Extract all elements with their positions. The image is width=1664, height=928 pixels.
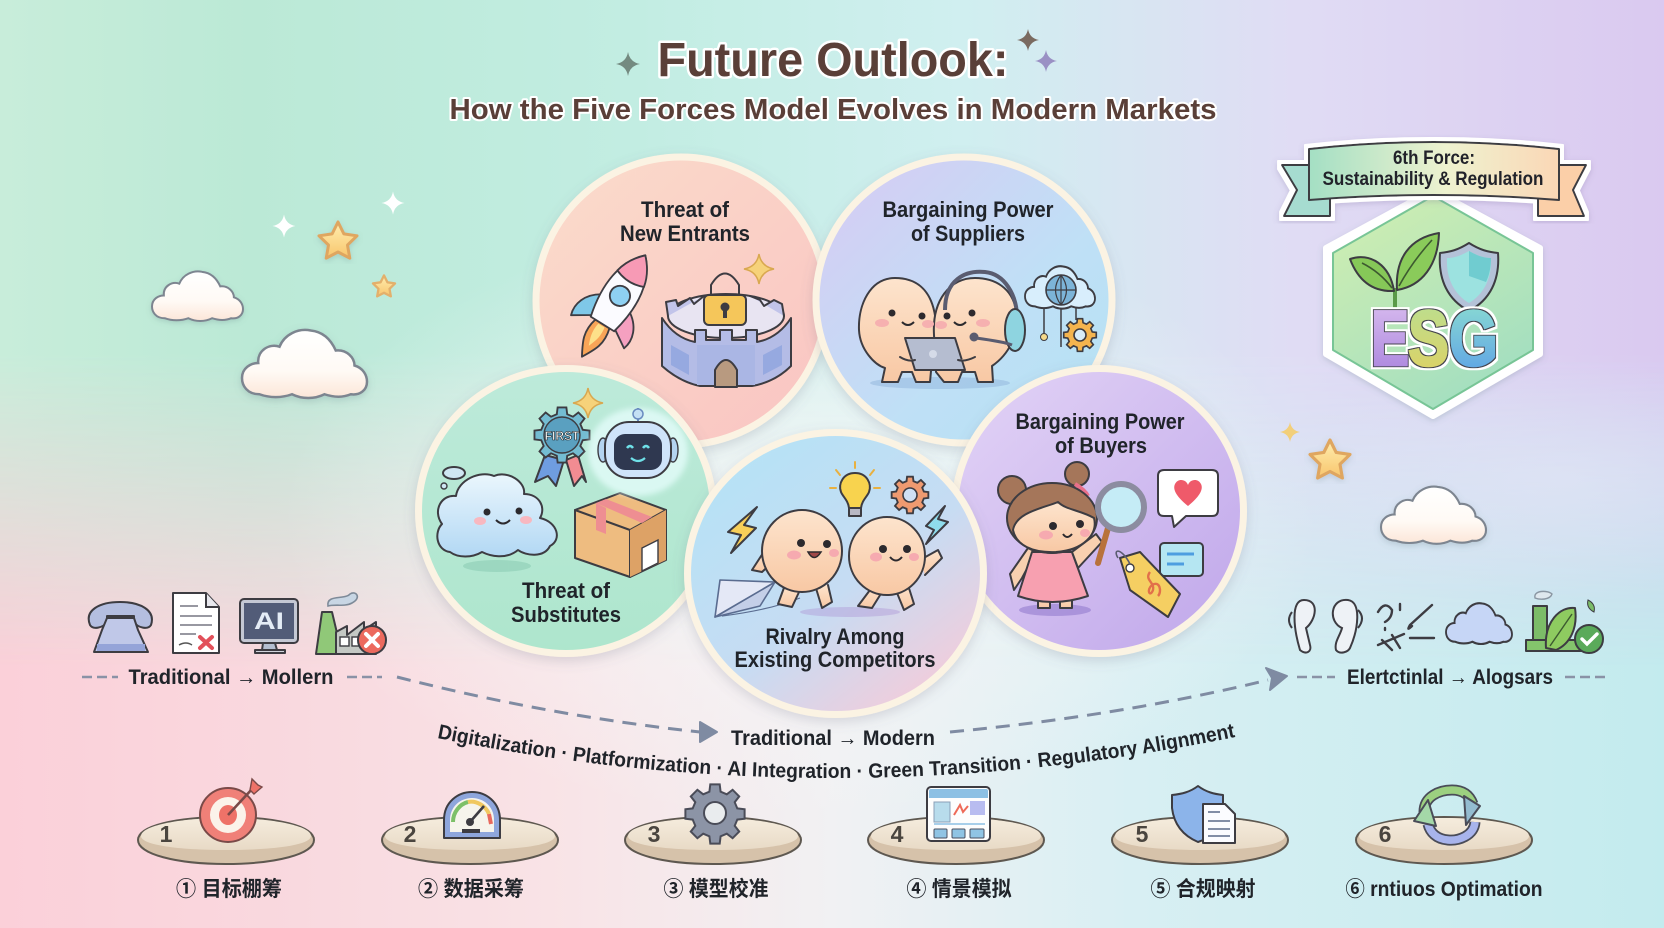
icon: smiling cloud [437, 467, 557, 572]
icon: light bulb [830, 462, 880, 516]
heading: buyers: of Buyers [1055, 433, 1147, 458]
icon: paper plane [715, 580, 800, 617]
icon: browser window [927, 787, 990, 841]
icon: rocket [554, 238, 673, 374]
arrow: left dashed to centre [397, 677, 717, 742]
icon: shield and document [1172, 786, 1235, 843]
step 6: cycle: 6 [1379, 821, 1391, 847]
panel: bargaining power of suppliers [816, 157, 1112, 443]
step label: ② 数据采筹 [418, 878, 524, 901]
icon: AI monitor [240, 599, 298, 653]
heading: buyers: Bargaining Power [1016, 409, 1185, 434]
arrow: centre dashed to right [950, 668, 1287, 732]
step 1: target [138, 779, 314, 901]
right caption: Elertctinlal → Alogsars [1347, 666, 1553, 689]
banner text [1322, 148, 1544, 190]
heading: rivalry: Existing Competitors [734, 647, 936, 672]
banner text: Sustainability & Regulation [1322, 169, 1544, 190]
step 4: browser window [868, 787, 1044, 901]
icon: target [200, 779, 262, 842]
icon: document [173, 593, 219, 653]
icon: two characters with headset and laptop [859, 272, 1025, 389]
icon: two competitors [752, 510, 942, 617]
icon: message card [1160, 543, 1203, 576]
icon: green factory [1526, 591, 1603, 653]
icon: factory with X [316, 593, 386, 654]
heading: substitutes [511, 578, 621, 627]
step label: ⑤ 合规映射 [1150, 878, 1256, 901]
step 1: target: 1 [160, 821, 173, 847]
panel: bargaining power of buyers [954, 368, 1244, 654]
curved trends text: Digitalization · Platformization · AI Integration · Green Transition · Regulatory Alignment [438, 724, 1236, 782]
ribbon banner [1282, 142, 1586, 216]
icon: cloud [1446, 603, 1512, 644]
icon: left lightning [728, 507, 757, 553]
decorative clouds and stars left [152, 192, 404, 398]
sixth force ESG badge [1282, 142, 1586, 416]
icon: award badge [534, 388, 603, 486]
decorative clouds and stars right [1280, 422, 1486, 544]
step 2: gauge: 2 [404, 821, 416, 847]
title sparkles [616, 29, 1057, 76]
heading: suppliers: of Suppliers [911, 221, 1025, 246]
icon: award badge: FIRST [545, 429, 580, 443]
traditional icons row [89, 593, 386, 654]
main title: Future Outlook: [658, 34, 1008, 87]
heading: new entrants: Threat of [641, 197, 730, 222]
icon: optimisation cycle [1414, 790, 1480, 840]
icon: gauge [444, 792, 500, 838]
hexagon badge [1326, 190, 1540, 416]
step label: ④ 情景模拟 [906, 878, 1012, 901]
heading: suppliers: Bargaining Power [882, 197, 1054, 222]
ESG wordmark: G [1449, 294, 1498, 382]
banner text: 6th Force: [1393, 148, 1475, 169]
step 5: shield and document: 5 [1136, 821, 1149, 847]
icon: cloud network and gear [1025, 266, 1096, 351]
subtitle: How the Five Forces Model Evolves in Modern Markets [450, 94, 1216, 126]
icon: earpieces [1289, 600, 1362, 653]
modern icons row [1289, 591, 1603, 653]
centre caption: Traditional → Modern [731, 727, 935, 750]
panel: threat of substitutes [418, 368, 714, 654]
heading: substitutes: Substitutes [511, 602, 621, 627]
icon: price tag [1116, 551, 1180, 617]
ESG wordmark [1371, 294, 1498, 382]
heading: substitutes: Threat of [522, 578, 611, 603]
icon: girl with magnifier [998, 462, 1144, 616]
icon: robot [588, 408, 688, 496]
heading: new entrants [620, 197, 750, 246]
icon: scribbled sketch [1378, 604, 1434, 650]
step 6: cycle [1346, 790, 1542, 901]
step 4: browser window: 4 [891, 821, 904, 847]
heading: rivalry: Rivalry Among [766, 624, 904, 649]
heading: new entrants: New Entrants [620, 221, 750, 246]
icon: right lightning [926, 506, 948, 544]
icon: cardboard box [575, 493, 666, 577]
icon: sprout [1350, 233, 1439, 312]
ESG wordmark: E [1371, 294, 1409, 382]
step label: ① 目标棚筹 [176, 878, 282, 901]
icon: AI monitor: AI [254, 608, 284, 635]
icon: gear [892, 477, 928, 513]
icon: telephone [89, 602, 152, 652]
ESG wordmark: S [1408, 294, 1449, 382]
panel: rivalry among existing competitors [688, 432, 984, 714]
heading: buyers [1016, 409, 1185, 458]
icon: gear [685, 784, 745, 844]
step 2: gauge [382, 792, 558, 901]
step 3: gear: 3 [648, 821, 660, 847]
heading: rivalry [734, 624, 936, 672]
heading: suppliers [882, 197, 1054, 246]
left caption: Traditional → Mollern [128, 666, 334, 689]
icon: speech bubble with heart [1158, 470, 1218, 527]
title block [450, 29, 1216, 126]
icon: shield [1440, 243, 1498, 311]
step label: ⑥ rntiuos Optimation [1346, 878, 1542, 901]
step label: ③ 模型校准 [664, 877, 768, 901]
icon: castle with padlock [662, 254, 791, 387]
panel: threat of new entrants [536, 157, 826, 445]
step 5: shield and document [1112, 786, 1288, 901]
step 3: gear [625, 784, 801, 901]
